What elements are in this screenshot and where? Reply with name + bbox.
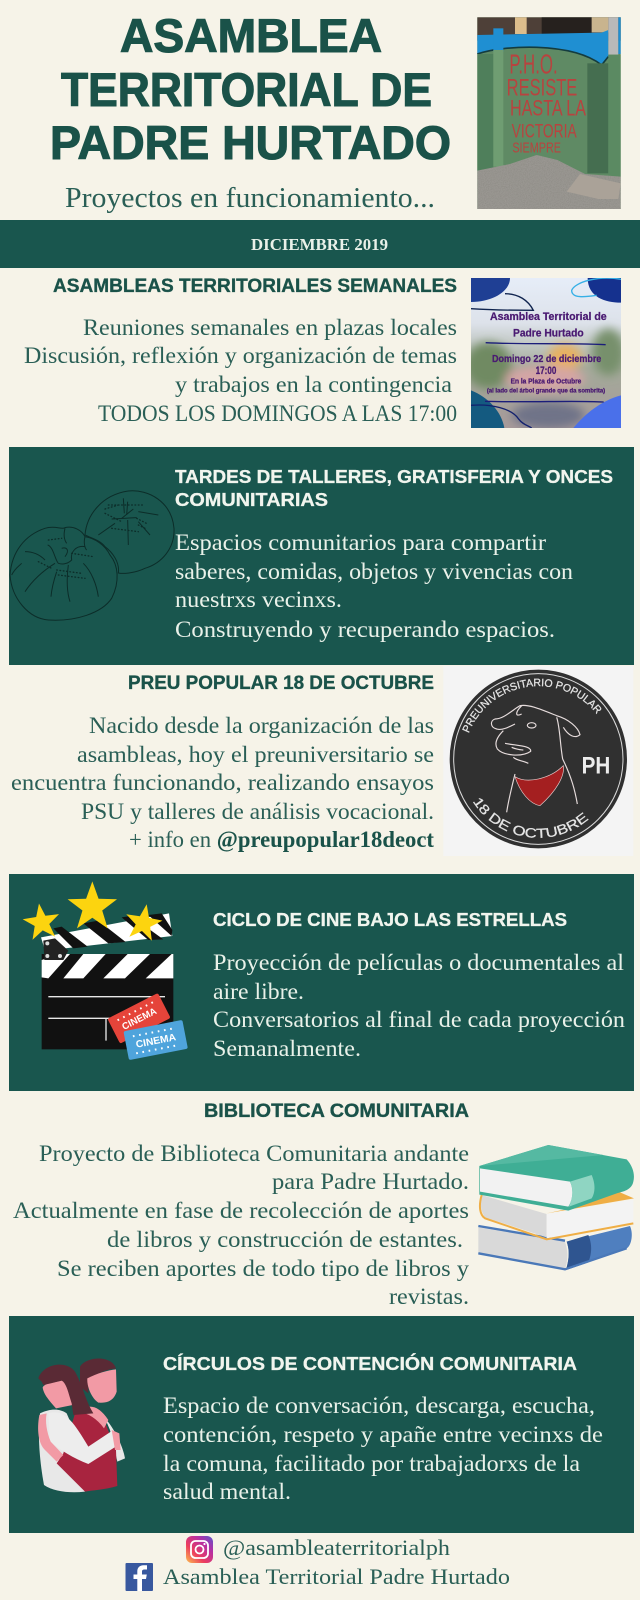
body text bbox=[163, 1393, 603, 1504]
body text bbox=[24, 315, 457, 426]
title: TERRITORIAL DE bbox=[61, 63, 432, 116]
body text: Discusión, reflexión y organización de temas bbox=[24, 343, 457, 368]
flyer text: En la Plaza de Octubre bbox=[511, 379, 581, 386]
body text: encuentra funcionando, realizando ensayos bbox=[11, 770, 434, 795]
blue ticket: CINEMA bbox=[135, 1032, 177, 1051]
body text bbox=[175, 530, 574, 642]
footer: facebook bbox=[126, 1563, 510, 1591]
facebook page name: Asamblea Territorial Padre Hurtado bbox=[163, 1564, 510, 1589]
illustration: two people hugging bbox=[38, 1358, 125, 1492]
dog drawing bbox=[491, 705, 580, 812]
body text: Conversatorios al final de cada proyección bbox=[213, 1007, 626, 1032]
body text bbox=[213, 950, 626, 1061]
body text: de libros y construcción de estantes. bbox=[107, 1227, 463, 1252]
panel: tardes de talleres bbox=[9, 447, 634, 665]
instagram handle: @asambleaterritorialph bbox=[223, 1535, 450, 1560]
title: ASAMBLEA bbox=[120, 9, 382, 62]
icon: clapperboard with stars and tickets bbox=[21, 881, 188, 1060]
graffiti text bbox=[507, 48, 586, 157]
red ticket: CINEMA bbox=[120, 1006, 159, 1033]
section: preu popular bbox=[11, 673, 434, 853]
heading: COMUNITARIAS bbox=[175, 489, 328, 510]
body text: Actualmente en fase de recolección de aportes bbox=[13, 1198, 469, 1223]
bandana bbox=[515, 766, 564, 806]
heading bbox=[175, 466, 613, 510]
body text: Reuniones semanales en plazas locales bbox=[83, 315, 457, 340]
bottom book bbox=[478, 1226, 632, 1270]
photo: graffiti wall bbox=[477, 17, 621, 209]
icon: tomatoes bbox=[10, 491, 174, 620]
graffiti text: HASTA LA bbox=[510, 96, 586, 121]
middle book bbox=[480, 1192, 634, 1239]
body text: Proyecto de Biblioteca Comunitaria andante bbox=[39, 1141, 469, 1166]
heading: ASAMBLEAS TERRITORIALES SEMANALES bbox=[53, 276, 457, 297]
body text: nuestrxs vecinxs. bbox=[175, 587, 342, 612]
flyer text: 17:00 bbox=[536, 365, 556, 377]
section: asambleas territoriales semanales bbox=[24, 276, 457, 426]
graffiti text: SIEMPRE bbox=[512, 141, 561, 157]
body text: + info en @preupopular18deoct bbox=[129, 827, 434, 853]
red ticket bbox=[107, 993, 171, 1044]
body text bbox=[11, 713, 434, 853]
body text: Espacios comunitarios para compartir bbox=[175, 530, 546, 555]
heading: CICLO DE CINE BAJO LAS ESTRELLAS bbox=[213, 909, 567, 930]
flyer text: (al lado del árbol grande que da sombrita) bbox=[487, 389, 605, 395]
footer: instagram bbox=[186, 1535, 450, 1563]
icon: instagram bbox=[186, 1536, 213, 1563]
logo ring text: 18 DE OCTUBRE bbox=[473, 798, 589, 838]
logo ring text: PREUNIVERSITARIO POPULAR bbox=[462, 678, 602, 733]
graffiti text: P.H.O. bbox=[509, 48, 558, 79]
icon: stack of books bbox=[478, 1145, 634, 1270]
flyer text: Padre Hurtado bbox=[513, 328, 584, 340]
flyer image bbox=[465, 278, 625, 429]
title bbox=[50, 9, 451, 169]
panel: círculos de contención bbox=[9, 1316, 634, 1533]
heading: CÍRCULOS DE CONTENCIÓN COMUNITARIA bbox=[163, 1353, 577, 1374]
body text: la comuna, facilitado por trabajadorxs de la bbox=[163, 1451, 580, 1476]
body text: Nacido desde la organización de las bbox=[89, 713, 434, 738]
blue ticket bbox=[123, 1020, 188, 1060]
body text: TODOS LOS DOMINGOS A LAS 17:00 bbox=[98, 401, 457, 426]
top book bbox=[479, 1145, 634, 1211]
graffiti text: VICTORIA bbox=[512, 121, 577, 142]
body text: contención, respeto y apañe entre vecinxs de bbox=[163, 1422, 603, 1447]
date band bbox=[0, 220, 640, 268]
panel: ciclo de cine bbox=[9, 874, 634, 1091]
body text: revistas. bbox=[389, 1284, 469, 1309]
logo: preuniversitario popular bbox=[444, 666, 633, 856]
body text bbox=[13, 1141, 470, 1309]
body text: salud mental. bbox=[163, 1479, 291, 1504]
flyer text: Asamblea Territorial de bbox=[490, 311, 607, 323]
body text: y trabajos en la contingencia bbox=[175, 372, 452, 397]
body text: para Padre Hurtado. bbox=[272, 1169, 469, 1194]
graffiti text: RESISTE bbox=[507, 75, 577, 102]
body text: aire libre. bbox=[213, 979, 304, 1004]
date text: DICIEMBRE 2019 bbox=[251, 235, 388, 254]
body text: PSU y talleres de análisis vocacional. bbox=[81, 799, 434, 824]
body text: saberes, comidas, objetos y vivencias con bbox=[175, 559, 574, 584]
stars bbox=[21, 881, 165, 942]
body text: Semanalmente. bbox=[213, 1036, 361, 1061]
heading: PREU POPULAR 18 DE OCTUBRE bbox=[128, 673, 434, 694]
body text: Proyección de películas o documentales al bbox=[213, 950, 624, 975]
body text: asambleas, hoy el preuniversitario se bbox=[77, 742, 434, 767]
title: PADRE HURTADO bbox=[50, 116, 451, 169]
icon: facebook bbox=[126, 1563, 153, 1591]
body text: Construyendo y recuperando espacios. bbox=[175, 617, 555, 642]
section: biblioteca comunitaria bbox=[13, 1101, 470, 1309]
logo ring text bbox=[462, 678, 602, 838]
flyer text bbox=[487, 311, 607, 395]
subtitle: Proyectos en funcionamiento... bbox=[65, 182, 435, 214]
body text: Se reciben aportes de todo tipo de libros y bbox=[57, 1256, 470, 1281]
heading: TARDES DE TALLERES, GRATISFERIA Y ONCES bbox=[175, 466, 613, 487]
PH mark: PH bbox=[582, 752, 610, 779]
flyer text: Domingo 22 de diciembre bbox=[492, 354, 602, 365]
heading: BIBLIOTECA COMUNITARIA bbox=[204, 1101, 469, 1122]
body text: Espacio de conversación, descarga, escucha, bbox=[163, 1393, 595, 1418]
